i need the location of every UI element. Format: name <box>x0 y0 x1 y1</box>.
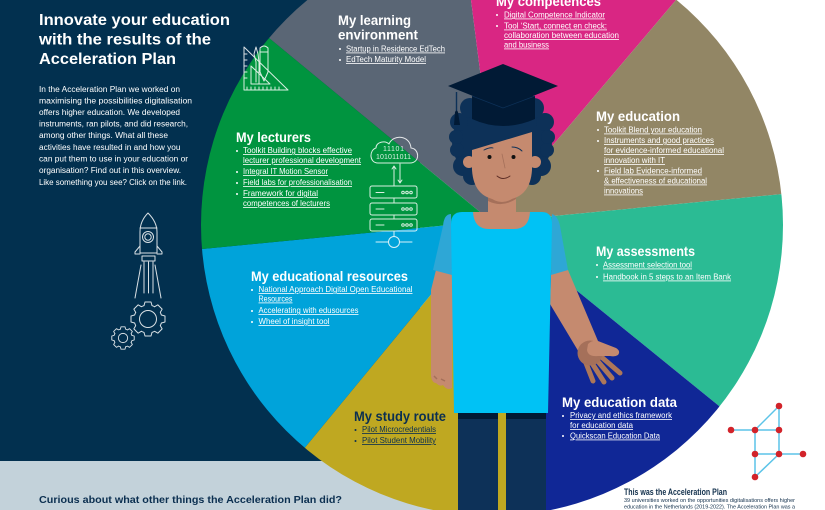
panel text: my education: Field lab Evidence-informed <box>604 166 702 176</box>
segment: study route <box>304 270 506 510</box>
panel text: my education: innovations <box>604 186 643 196</box>
icon: cloud and servers <box>370 137 418 248</box>
text block: this was the acceleration plan: This was the Acceleration Plan <box>624 487 727 497</box>
face <box>472 132 532 200</box>
panel text: my educational resources: National Approach Digital Open Educational <box>258 285 413 294</box>
panel: bottom band <box>0 461 460 510</box>
network graph icon <box>728 403 806 480</box>
panel text: my learning environment: My learning <box>338 12 411 28</box>
panel text: my educational resources <box>251 268 413 326</box>
intro text: instruments, ran pilots, and did research, <box>39 120 188 128</box>
panel text: my education: Instruments and good practices <box>604 136 714 145</box>
text block: this was the acceleration plan <box>624 487 796 510</box>
intro text: In the Acceleration Plan we worked on <box>39 85 180 94</box>
left arm <box>431 270 453 389</box>
segment: assessments <box>550 194 783 406</box>
title: Acceleration Plan <box>39 51 176 68</box>
intro text: offers higher education. We developed <box>39 108 180 117</box>
intro text <box>39 85 192 187</box>
intro text: among other things. What all these <box>39 131 169 140</box>
segment: competences <box>471 0 676 146</box>
panel text: my learning environment: EdTech Maturity Model <box>346 55 426 64</box>
panel text: my education: My education <box>596 108 680 124</box>
panel text: my learning environment: Startup in Residence EdTech <box>346 44 445 54</box>
intro text: organisation? Find out in this overview. <box>39 166 181 175</box>
panel text: my educational resources: My educational resources <box>251 268 408 284</box>
icon: ruler and pencils <box>244 46 288 90</box>
panel text: my education data: Quickscan Education Data <box>570 432 661 440</box>
sleeves <box>433 214 568 275</box>
panel text: my competences <box>496 0 619 50</box>
panel text: my study route: Pilot Student Mobility <box>362 436 436 445</box>
icon: cloud and servers: 11101 <box>383 146 404 153</box>
right arm and hand <box>550 270 620 382</box>
panel text: my assessments <box>596 243 732 282</box>
segment: education data <box>546 270 720 510</box>
title <box>38 12 230 68</box>
panel: navy background <box>0 0 420 461</box>
title: with the results of the <box>38 32 211 48</box>
title: Innovate your education <box>39 12 230 29</box>
panel text: my lecturers: Field labs for professionalisation <box>243 178 352 187</box>
panel text: my educational resources: Wheel of insight tool <box>258 317 330 326</box>
ears <box>463 156 541 168</box>
panel text: my learning environment <box>338 12 445 64</box>
hair <box>449 98 555 185</box>
panel text: my learning environment: environment <box>338 26 418 42</box>
shirt <box>451 212 552 413</box>
icon: rocket and gears <box>112 213 165 349</box>
intro text: can put them to use in your education or <box>39 154 188 164</box>
panel text: my assessments: Handbook in 5 steps to an Item Bank <box>603 272 732 282</box>
panel text: my lecturers: Framework for digital <box>243 189 318 198</box>
person illustration <box>431 64 620 510</box>
panel text: my education: for evidence-informed educational <box>604 146 724 155</box>
intro text: maximising the possibilities digitalisation <box>39 96 192 106</box>
panel text: my education: innovation with IT <box>604 156 665 165</box>
panel text: my education data: Privacy and ethics framework <box>570 411 673 420</box>
panel text: my competences: Tool ‘Start, connect en check: <box>504 22 607 30</box>
panel text: my study route: Pilot Microcredentials <box>362 425 436 434</box>
graduation cap <box>448 64 558 126</box>
panel text: my education <box>596 108 724 196</box>
segment: lecturers <box>201 38 480 249</box>
panel text: my educational resources: Resources <box>258 294 292 304</box>
facial features <box>484 147 522 178</box>
panel text: my study route <box>354 408 446 445</box>
panel text: my competences: Digital Competence Indicator <box>504 10 605 20</box>
intro text: Like something you see? Click on the link. <box>39 178 187 187</box>
panel text: my education data <box>562 394 677 440</box>
panel text: my lecturers: Integral IT Motion Sensor <box>243 167 328 176</box>
text block: this was the acceleration plan: 39 universities worked on the opportunities digitalisations offers higher <box>624 498 795 504</box>
panel text: my competences: collaboration between education <box>504 31 619 40</box>
panel text: my assessments: Assessment selection tool <box>603 260 692 270</box>
wheel of segments <box>201 0 783 510</box>
panel text: my lecturers <box>236 129 362 208</box>
panel text: my education data: My education data <box>562 394 677 410</box>
intro text: activities have resulted in and how you <box>39 143 180 152</box>
panel text: my competences: and business <box>504 40 549 50</box>
panel text: my education data: for education data <box>570 421 634 430</box>
panel text: my education: Toolkit Blend your education <box>604 126 702 134</box>
panel text: my lecturers: lecturer professional development <box>243 156 362 165</box>
segment: educational resources <box>202 225 452 448</box>
segment: learning environment <box>269 0 488 212</box>
segment: education <box>516 0 782 216</box>
icon: cloud and servers: 101011011 <box>376 154 411 161</box>
panel text: my assessments: My assessments <box>596 243 695 259</box>
panel text: my educational resources: Accelerating with edusources <box>258 306 358 315</box>
panel text: my study route: My study route <box>354 408 446 424</box>
bottom heading: Curious about what other things the Acceleration Plan did? <box>39 494 342 506</box>
panel text: my education: & effectiveness of educational <box>604 176 707 186</box>
neck <box>473 190 530 229</box>
panel text: my lecturers: competences of lecturers <box>243 199 330 208</box>
panel text: my lecturers: Toolkit Building blocks effective <box>243 146 353 155</box>
panel text: my lecturers: My lecturers <box>236 129 311 145</box>
legs <box>458 413 546 510</box>
